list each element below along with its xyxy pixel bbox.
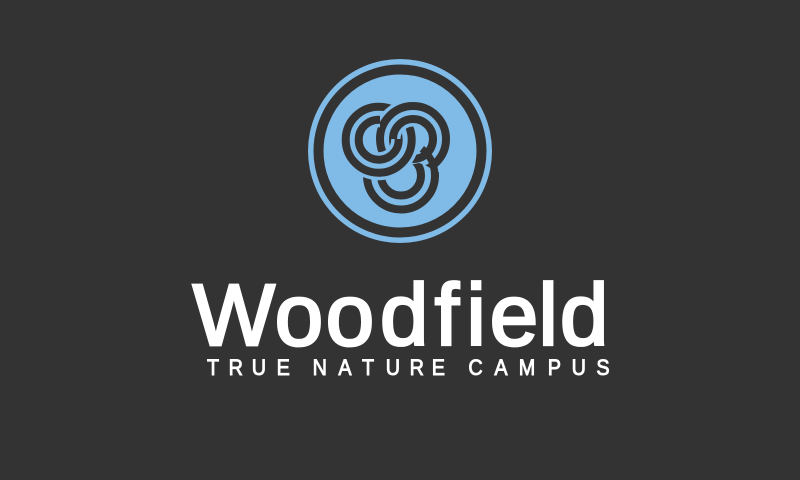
logo lockup [191,59,610,376]
icon: bottom arc tail [422,149,435,176]
icon: right ring overlap at top [380,102,425,139]
icon: left ring [346,107,412,173]
icon: bottom arc [363,163,439,214]
tagline: TRUE NATURE CAMPUS [207,356,610,380]
icon: circular emblem [308,59,492,243]
wordmark: Woodfield [193,267,608,364]
icon: right ring [380,106,446,172]
